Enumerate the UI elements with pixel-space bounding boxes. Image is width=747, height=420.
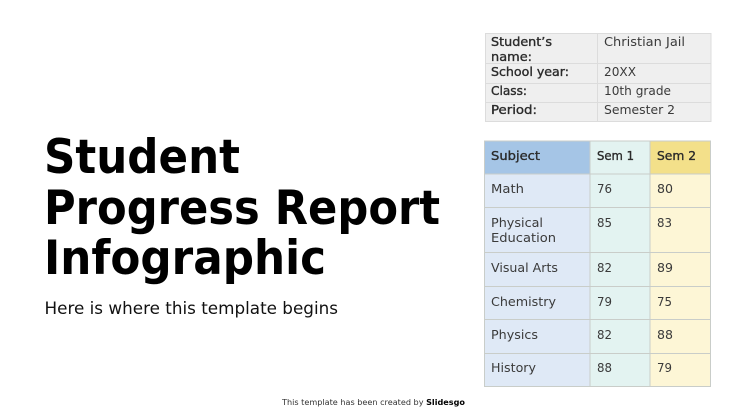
- row: student's name: name:: [491, 50, 532, 64]
- row: math: 80: [657, 182, 673, 196]
- title: Student: [44, 130, 240, 185]
- row: physical education: 85: [597, 216, 612, 230]
- header row: Subject: [491, 149, 540, 163]
- row: school year: 20XX: [604, 65, 636, 79]
- title: Progress Report: [44, 181, 440, 236]
- row: history: [491, 361, 672, 375]
- row: math: Math: [491, 182, 524, 196]
- row: physics: 88: [657, 328, 673, 342]
- title: [44, 130, 440, 286]
- row: math: [491, 182, 673, 196]
- row: school year: [491, 65, 636, 79]
- row: class: 10th grade: [604, 84, 671, 98]
- row: student's name: Christian Jail: [604, 35, 685, 49]
- row: physical education: Physical: [491, 216, 543, 230]
- header row: Sem 2: [657, 149, 696, 163]
- row: chemistry: 75: [657, 295, 672, 309]
- header row: Sem 1: [597, 149, 634, 163]
- row: chemistry: [491, 295, 672, 309]
- row: history: History: [491, 361, 536, 375]
- footer credit: This template has been created by Slidesgo: [281, 398, 465, 407]
- header row: [491, 149, 696, 163]
- row: physics: 82: [597, 328, 612, 342]
- row: visual arts: Visual Arts: [491, 261, 558, 275]
- row: visual arts: 82: [597, 261, 612, 275]
- row: chemistry: 79: [597, 295, 612, 309]
- panel: student information table: [485, 33, 711, 122]
- row: physics: [491, 328, 673, 342]
- row: period: [491, 103, 675, 117]
- row: chemistry: Chemistry: [491, 295, 556, 309]
- row: physical education: 83: [657, 216, 672, 230]
- row: class: Class:: [491, 84, 527, 98]
- row: history: 88: [597, 361, 612, 375]
- subtitle: Here is where this template begins: [44, 299, 338, 319]
- row: student's name: Student’s: [491, 35, 552, 49]
- row: math: 76: [597, 182, 612, 196]
- panel: grades table: [484, 141, 711, 387]
- row: visual arts: 89: [657, 261, 673, 275]
- row: physical education: Education: [491, 231, 556, 245]
- row: period: Semester 2: [604, 103, 675, 117]
- row: physics: Physics: [491, 328, 538, 342]
- row: class: [491, 84, 671, 98]
- row: history: 79: [657, 361, 672, 375]
- row: visual arts: [491, 261, 673, 275]
- row: period: Period:: [491, 103, 537, 117]
- title: Infographic: [44, 231, 326, 286]
- row: student's name: [491, 35, 685, 64]
- row: physical education: [491, 216, 672, 245]
- row: school year: School year:: [491, 65, 569, 79]
